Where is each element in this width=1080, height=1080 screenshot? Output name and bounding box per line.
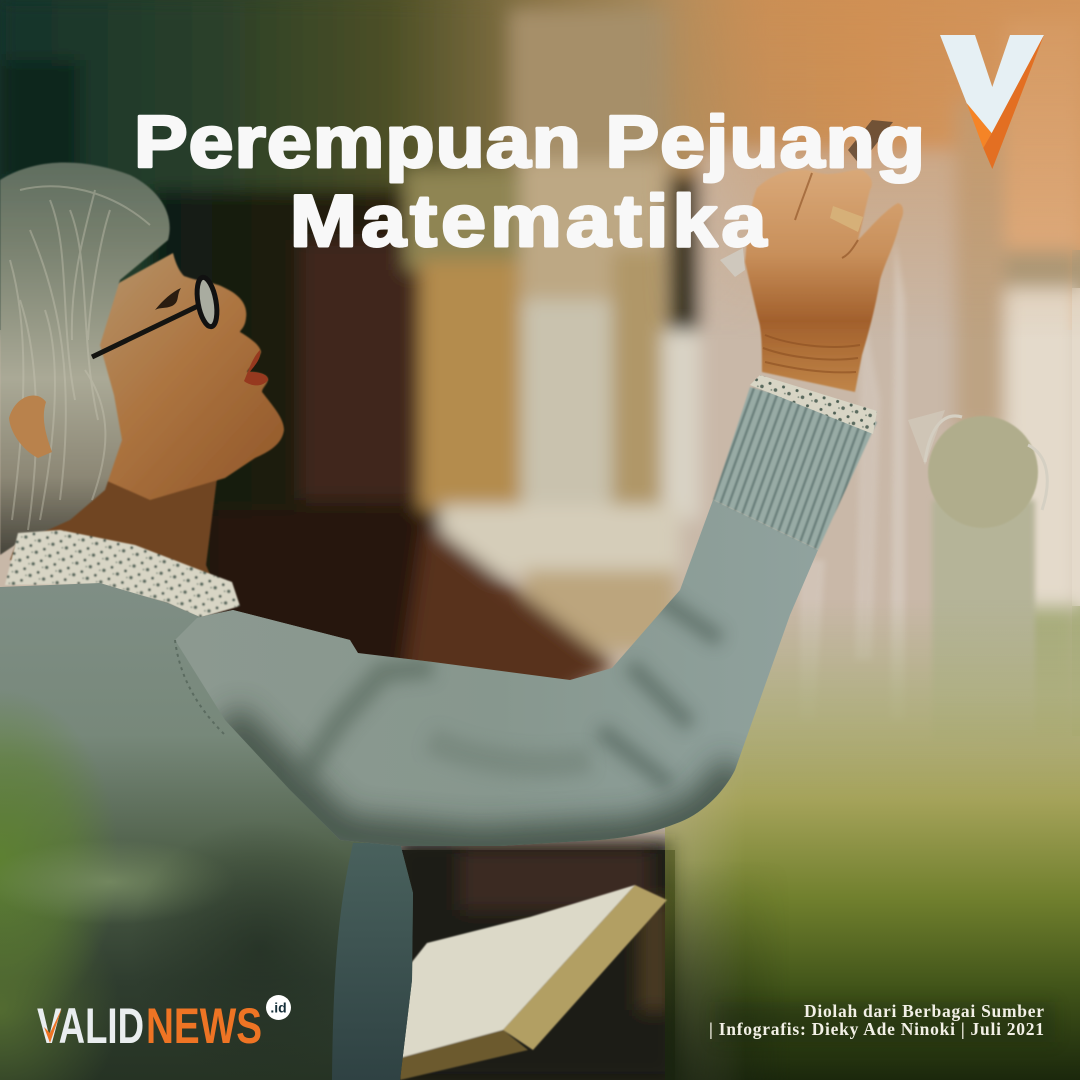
hand [745, 170, 903, 392]
sweater side panel [332, 843, 413, 1080]
sleeve [175, 500, 818, 848]
id badge [266, 995, 291, 1020]
hanging mask on board [908, 410, 1047, 740]
eye lashes [155, 288, 181, 310]
source credit: | Infografis: Dieky Ade Ninoki | Juli 2021 [709, 1019, 1044, 1039]
marker [720, 248, 745, 277]
ribbed cuff [713, 387, 877, 550]
base behind dark lower area [395, 850, 675, 1080]
grey hair [0, 162, 170, 555]
title: Matematika [290, 181, 768, 262]
id badge: .id [270, 1000, 287, 1016]
brand V emblem [940, 35, 1044, 169]
shirt collar [5, 530, 240, 618]
shoulder seam [175, 640, 225, 735]
bottom right green foliage blur [665, 600, 1080, 1080]
ValidNews logo [37, 995, 291, 1054]
face [60, 253, 284, 500]
title [134, 102, 925, 262]
ValidNews logo: VALID [37, 998, 144, 1054]
ear [9, 395, 52, 458]
open book [400, 885, 667, 1080]
neck [10, 450, 225, 610]
dark strip beside book [665, 876, 758, 1080]
source credit: Diolah dari Berbagai Sumber [804, 1001, 1044, 1021]
sweater lighting [0, 703, 338, 1080]
hair strands [10, 186, 150, 530]
cuff frill [750, 375, 877, 434]
wedding ring [830, 206, 863, 232]
whiteboard streaks [800, 240, 905, 720]
warm top light over board [674, 0, 1080, 308]
glasses [92, 276, 220, 357]
lips [244, 350, 268, 385]
marker cap [848, 120, 893, 165]
title: Perempuan Pejuang [134, 102, 925, 183]
source credit [709, 1001, 1044, 1039]
sweater body [0, 583, 413, 1080]
knuckle and wrist creases [763, 173, 860, 372]
woman teacher [0, 120, 903, 1080]
ValidNews logo: NEWS [146, 998, 262, 1054]
sleeve folds [225, 595, 740, 848]
lower vignette behind credit [715, 1002, 1055, 1042]
